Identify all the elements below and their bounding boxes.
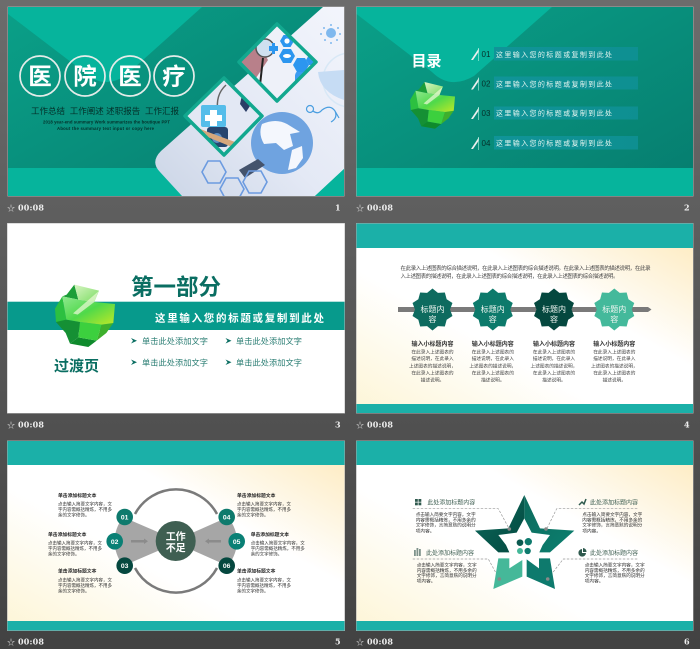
text block 05: 字内容需概括精炼，不用多 [251, 545, 305, 552]
list item 04: 04 [482, 139, 491, 148]
footer: slide 5: ☆ [7, 638, 15, 647]
badge 4: 容 [610, 314, 618, 324]
text block 05 [251, 531, 305, 558]
text block: bottom left [417, 549, 477, 585]
text column 4: 在此录入上述图表的 [593, 370, 636, 377]
band title: 这里输入您的标题或复制到此处 [155, 312, 324, 324]
panel: slide 5 radial diagram [7, 440, 345, 631]
text block: top right: 点击输入简要文字内容，文字 [582, 511, 643, 518]
icon: green cross [410, 82, 455, 129]
text block: bottom left: 项内容。 [417, 578, 435, 585]
text block: bottom right [585, 549, 645, 585]
text block: top right: 文字修饰，言简意赅的说明分 [582, 522, 643, 529]
text block: top right: 内容需概括精炼，不用多余的 [582, 516, 643, 523]
text block 06: 点击输入简要文字内容，文 [237, 576, 292, 584]
text column 4: 描述说明。 [603, 376, 626, 384]
text block 02 [48, 531, 102, 558]
text block 01: 字内容需概括精炼，不用多 [58, 506, 112, 513]
icon: hexagons [202, 161, 267, 200]
text block 01: 点击输入简要文字内容，文 [58, 500, 112, 508]
text block 01 [58, 492, 112, 518]
text column 1: 在此录入上述图表的 [411, 348, 454, 356]
text block: top right: 此处添加标题内容 [590, 498, 638, 506]
bullet list: 单击此处添加文字 [236, 358, 302, 368]
english caption: About the summary text input or copy here [57, 126, 155, 131]
number nodes: 02 [111, 539, 119, 546]
number nodes: 06 [223, 563, 231, 570]
badge 1: 标题内 [420, 304, 444, 314]
text column 2: 在此录入上述图表的 [472, 370, 514, 377]
footer: slide 1: ☆ [7, 204, 15, 213]
badge 2: 标题内 [481, 304, 505, 314]
footer: slide 5 [7, 636, 341, 647]
icon: dark block [239, 159, 265, 178]
text column 2: 上述图表的描述说明， [469, 362, 516, 370]
text column 2: 在此录入上述图表的 [472, 348, 514, 356]
heading: 目录: 目录 [412, 53, 442, 70]
list item 03: 这里输入您的标题或复制到此处 [496, 109, 612, 118]
text block 06: 字内容需概括精炼，不用多 [237, 582, 292, 589]
badge 1 [413, 288, 452, 330]
text block: top left: 文字修饰，言简意赅的说明分 [416, 522, 476, 529]
badge 3 [534, 288, 574, 330]
badge 2: 容 [489, 314, 497, 324]
list item 02: 这里输入您的标题或复制到此处 [496, 79, 612, 88]
text block 06: 余的文字修饰。 [237, 588, 268, 594]
text block 04: 字内容需概括精炼，不用多 [237, 506, 292, 513]
footer: slide 6: 6 [684, 636, 690, 646]
text column 3 [531, 340, 577, 384]
list item 01: 01 [482, 50, 491, 59]
text block 02: 字内容需概括精炼，不用多 [48, 545, 102, 552]
icon: globe [251, 112, 313, 174]
footer: slide 6 [356, 636, 690, 647]
text block 03: 点击输入简要文字内容，文 [58, 576, 112, 584]
title: 医院医疗: 医 [118, 64, 142, 90]
text block 03: 字内容需概括精炼，不用多 [58, 582, 112, 589]
text column 2: 描述说明，在此录入 [472, 355, 514, 362]
panel: slide 1 cover [8, 6, 344, 196]
text block 04: 余的文字修饰。 [237, 512, 268, 518]
badge 3: 标题内 [542, 304, 566, 314]
icon: grid [415, 499, 421, 505]
badge 4: 标题内 [602, 304, 626, 314]
text column 4: 输入小标题内容 [593, 340, 635, 348]
text block 05: 单击添加标题文本 [251, 531, 289, 538]
center circle: 工作 [166, 530, 186, 543]
text block: top left: 此处添加标题内容 [427, 498, 475, 506]
panel: slide 4 timeline [356, 223, 694, 414]
badge 2 [473, 288, 513, 330]
list item 02 [471, 76, 638, 90]
text column 1: 描述说明，在此录入 [411, 355, 454, 362]
text block: bottom left: 文字修饰，言简意赅的说明分 [417, 572, 477, 579]
title: 医院医疗: 医 [28, 64, 52, 90]
subtitle: 工作总结 工作阐述 述职报告 工作汇报 [31, 106, 179, 116]
leader dots [498, 527, 550, 581]
text block 04: 单击添加标题文本 [237, 492, 276, 499]
footer: slide 6: 00:08 [367, 636, 393, 646]
icon: pie chart [578, 548, 587, 557]
text column 4: 描述说明，在此录入 [593, 355, 636, 362]
text column 2 [469, 340, 516, 384]
description paragraph: 在此录入上述图表的综合描述说明，在此录入上述图表的综合描述说明。在此录入上述图表的描述说明，在此录 [400, 264, 651, 272]
footer: slide 6: ☆ [356, 638, 364, 647]
dashed leader lines [413, 509, 637, 579]
english caption [43, 120, 170, 131]
text block 03 [58, 568, 112, 594]
text block: bottom left: 点击输入简要文字内容，文字 [417, 562, 477, 568]
badge 1: 容 [428, 314, 436, 324]
text column 3: 上述图表的描述说明， [531, 362, 577, 370]
text block 02: 单击添加标题文本 [48, 531, 87, 538]
text block: bottom right: 项内容。 [585, 578, 603, 585]
bullet list: 单击此处添加文字 [142, 336, 208, 346]
center circle [156, 521, 196, 561]
text column 2: 输入小标题内容 [472, 340, 514, 348]
footer: slide 2 [356, 202, 690, 213]
icon: green cross [55, 285, 115, 347]
footer: slide 4: 4 [684, 420, 690, 430]
text block 05: 点击输入简要文字内容，文 [251, 540, 305, 546]
text column 1: 描述说明。 [421, 376, 444, 384]
number nodes: 05 [233, 539, 241, 546]
text column 3: 在此录入上述图表的 [533, 370, 575, 377]
description paragraph: 入上述图表的描述说明，在此录入上述图表的综合描述说明，在此录入上述图表的综合描述说明。 [400, 272, 618, 280]
text column 4 [591, 340, 638, 384]
description paragraph [400, 264, 651, 280]
number nodes [106, 509, 245, 574]
image diamond: stethoscope and medical icons [239, 24, 318, 101]
bullet list [131, 336, 302, 368]
badge 3: 容 [550, 314, 558, 324]
text column 1: 输入小标题内容 [411, 340, 454, 348]
text column 3: 在此录入上述图表的 [533, 348, 575, 356]
text column 3: 描述说明。 [542, 376, 566, 384]
title: 医院医疗: 院 [73, 62, 97, 90]
icon: dotted circle [320, 24, 341, 44]
footer: slide 2: 2 [684, 202, 690, 212]
footer: slide 3: 3 [335, 420, 341, 430]
text block: bottom right: 文字修饰，言简意赅的说明分 [585, 572, 645, 579]
text block: bottom right: 此处添加标题内容 [590, 549, 638, 557]
panel: slide 6 star diagram [356, 440, 694, 631]
footer: slide 4: ☆ [356, 421, 364, 430]
footer: slide 1: 1 [335, 202, 341, 212]
icon: trend line [579, 499, 586, 505]
text block: top left: 项内容。 [416, 528, 434, 534]
icon: stethoscope [306, 106, 339, 122]
footer: slide 3: 00:08 [18, 420, 44, 430]
text block: bottom left: 内容需概括精炼，不用多余的 [417, 567, 477, 574]
text block 01: 余的文字修饰。 [58, 512, 90, 518]
panel: slide 3 section divider [7, 223, 345, 414]
text column 1: 在此录入上述图表的 [411, 370, 454, 377]
number nodes: 04 [223, 514, 231, 522]
footer: slide 5: 00:08 [18, 636, 44, 646]
text block 03: 单击添加标题文本 [58, 568, 97, 574]
badge 4 [594, 288, 634, 330]
text column 3: 描述说明，在此录入 [533, 355, 575, 362]
footer: slide 4 [356, 420, 690, 430]
text block 05: 余的文字修饰。 [251, 550, 282, 558]
english caption: 2018 year-end summary Work summarizes the boutique PPT [43, 120, 170, 124]
text block: top left [416, 498, 476, 534]
text column 4: 上述图表的描述说明， [591, 362, 638, 370]
text block: top left: 点击输入简要文字内容，文字 [416, 511, 476, 518]
text block: top right [582, 498, 643, 534]
text column 3: 输入小标题内容 [533, 340, 575, 348]
number nodes: 03 [121, 563, 129, 570]
bullet list: 单击此处添加文字 [142, 358, 208, 368]
star [475, 495, 574, 589]
list item 01 [471, 47, 638, 61]
footer: slide 5: 5 [335, 636, 341, 646]
text column 4: 在此录入上述图表的 [593, 348, 636, 356]
timeline arrow [398, 307, 652, 312]
text column 1 [409, 340, 456, 384]
list item 04: 这里输入您的标题或复制到此处 [496, 139, 612, 148]
image diamond: doctor and medical cross [185, 78, 262, 155]
ring arcs [135, 489, 217, 593]
text block 01: 单击添加标题文本 [58, 492, 97, 499]
list item 03 [471, 106, 638, 120]
text block 06 [237, 568, 292, 594]
number nodes: 01 [121, 514, 129, 522]
footer: slide 4: 00:08 [367, 420, 393, 430]
heading: 第一部分: 第一部分 [131, 275, 221, 300]
icon: bar chart [414, 548, 421, 556]
caption: 过渡页: 过渡页 [54, 357, 99, 375]
text column 2: 描述说明。 [481, 376, 505, 384]
text block: bottom right: 内容需概括精炼，不用多余的 [585, 567, 645, 574]
band [8, 302, 344, 330]
text block: bottom right: 点击输入简要文字内容，文字 [585, 562, 645, 568]
icon: pale ring [318, 53, 344, 107]
list item 02: 02 [482, 80, 491, 88]
footer: slide 1 [7, 202, 341, 213]
text block 02: 余的文字修饰。 [48, 550, 80, 558]
text block 02: 点击输入简要文字内容，文 [48, 540, 102, 546]
list item 04 [471, 136, 638, 150]
title: 医院医疗 [20, 56, 194, 96]
bullet list: 单击此处添加文字 [236, 336, 302, 346]
center circle: 不足 [166, 542, 186, 554]
footer: slide 3: ☆ [7, 421, 15, 430]
panel: slide 2 contents [356, 6, 694, 196]
footer: slide 2: ☆ [356, 204, 364, 213]
text column 1: 上述图表的描述说明， [409, 362, 456, 370]
arrows [131, 538, 221, 544]
text block 06: 单击添加标题文本 [237, 568, 276, 574]
footer: slide 2: 00:08 [367, 202, 393, 212]
text block 04: 点击输入简要文字内容，文 [237, 500, 292, 508]
text block: top left: 内容需概括精炼，不用多余的 [416, 516, 476, 523]
text block: bottom left: 此处添加标题内容 [426, 549, 474, 557]
list item 03: 03 [482, 109, 491, 118]
title: 医院医疗: 疗 [162, 64, 186, 90]
text block 04 [237, 492, 292, 518]
footer: slide 1: 00:08 [18, 202, 44, 212]
text block 03: 余的文字修饰。 [58, 588, 90, 594]
list item 01: 这里输入您的标题或复制到此处 [496, 50, 612, 59]
gray connectors [114, 517, 237, 566]
footer: slide 3 [7, 420, 341, 430]
text block: top right: 项内容。 [582, 528, 601, 534]
